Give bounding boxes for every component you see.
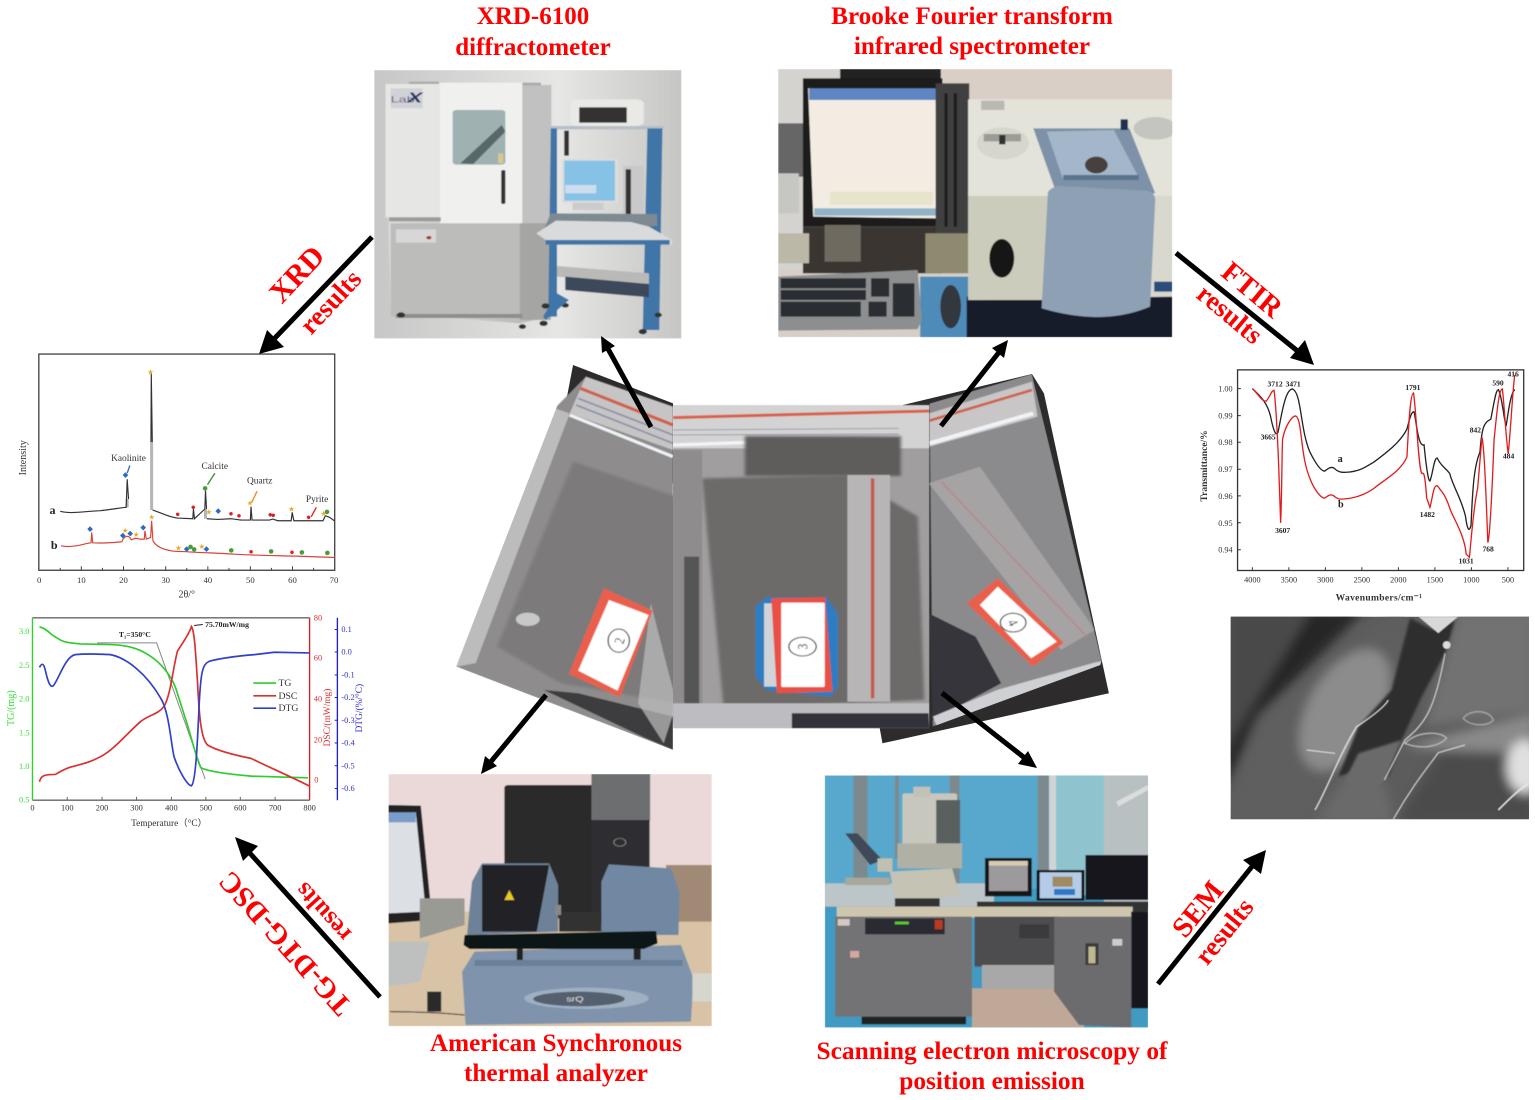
mineral pointers: [127, 466, 316, 517]
arrow: spectrometer to FTIR results: [1176, 253, 1314, 365]
label: XRD results: [263, 239, 367, 340]
arrow: diffractometer to XRD results: [259, 237, 372, 354]
mineral markers: ●: [203, 485, 208, 492]
axes frame: 10: [77, 575, 86, 585]
curve b: [61, 521, 335, 558]
label: SEM results: [1166, 875, 1260, 970]
legend: DSC: [278, 691, 297, 702]
bag 3: 3: [794, 644, 811, 649]
arrow: bags to SEM instrument: [942, 693, 1037, 768]
axes: -0.4: [341, 739, 355, 748]
arrow: SEM instrument to SEM results: [1158, 850, 1266, 984]
mineral markers: ●: [290, 551, 294, 556]
axes frame: 60: [288, 575, 298, 585]
axes: 300: [130, 803, 143, 812]
black background card right: [879, 374, 1109, 743]
photo: XRD-6100 diffractometer: [374, 70, 682, 339]
mineral markers: ●: [307, 516, 311, 521]
axes frame: Intensity: [18, 440, 29, 475]
axes: 1.5: [19, 729, 29, 738]
label: FTIR results: results: [1191, 278, 1269, 350]
mineral labels: Pyrite: [306, 495, 328, 505]
axes: 1000: [1463, 576, 1480, 585]
mineral markers: ★: [148, 513, 155, 522]
axes frame: 20: [119, 575, 129, 585]
axes: 600: [234, 803, 247, 812]
axes: 60: [314, 654, 322, 663]
axes: 0.98: [1218, 438, 1233, 447]
mineral labels: Calcite: [201, 462, 228, 472]
label: XRD results: results: [294, 264, 367, 340]
mineral markers: ●: [268, 548, 274, 555]
mineral markers: ★: [199, 542, 206, 551]
axes: Wavenumbers/cm⁻¹: [1336, 593, 1422, 603]
axes: 1.0: [19, 762, 29, 771]
axes: 0.94: [1218, 546, 1233, 555]
DTG curve: [39, 652, 310, 786]
axes frame: 0: [37, 575, 42, 585]
peak labels: 3665: [1261, 432, 1276, 441]
mineral markers: ◆: [140, 522, 146, 531]
axes frame: [18, 354, 339, 601]
mineral markers: ●: [188, 544, 193, 551]
axes: -0.5: [341, 761, 355, 770]
label: SEM results: results: [1188, 892, 1260, 970]
mineral labels: b: [51, 538, 58, 552]
peak labels: 3607: [1275, 526, 1290, 535]
axes: -0.3: [341, 716, 355, 725]
bag 2: [456, 377, 676, 750]
photo: XRD-6100 diffractometer: X: [406, 90, 424, 106]
mineral markers: [87, 367, 330, 557]
axes: 0: [314, 775, 318, 784]
title: Brooke Fourier transform infrared spectrometer: [831, 3, 1113, 60]
mineral labels: a: [50, 503, 56, 517]
axes: 3.0: [19, 627, 29, 636]
mineral markers: ◆: [87, 524, 93, 533]
axes: [6, 613, 365, 829]
peak labels: a: [1338, 454, 1343, 465]
photo: scanning electron microscope: [825, 775, 1149, 1028]
peak labels: 590: [1492, 378, 1504, 387]
bag 2: 2: [610, 636, 628, 645]
mineral labels: Quartz: [247, 476, 272, 486]
photo: Fourier transform infrared spectrometer: [778, 69, 1177, 337]
legend: TG: [278, 678, 291, 689]
axes: 400: [165, 803, 178, 812]
peak labels: 3471: [1286, 379, 1301, 388]
peak labels: b: [1338, 500, 1344, 511]
axes: 0.5: [19, 796, 29, 805]
axes: 0.95: [1218, 519, 1233, 528]
DSC curve: [39, 627, 310, 786]
chart: TG-DTG-DSC thermal curves: [6, 613, 365, 829]
title: American Synchronous thermal analyzer: thermal analyzer: [464, 1060, 648, 1087]
axes: Transmittance/%: [1200, 430, 1210, 501]
peak labels: [1261, 369, 1519, 566]
axes: 1500: [1427, 576, 1443, 585]
title: American Synchronous thermal analyzer: American Synchronous: [430, 1030, 682, 1057]
mineral markers: ●: [325, 550, 330, 557]
title: Brooke Fourier transform infrared spectrometer: infrared spectrometer: [854, 33, 1090, 60]
axes: TG/(mg): [6, 690, 17, 726]
axes: 500: [1502, 576, 1514, 585]
axes: 500: [200, 803, 212, 812]
peak labels: 416: [1508, 369, 1519, 378]
peak labels: 1791: [1405, 383, 1421, 392]
arrow: bags to thermal analyzer: [481, 695, 546, 774]
mineral markers: ●: [192, 546, 197, 553]
axes frame: 2θ/°: [178, 590, 195, 601]
axes: -0.6: [341, 784, 355, 793]
label: SEM results: SEM: [1166, 875, 1230, 944]
photo: American synchronous thermal analyzer: [388, 774, 712, 1026]
mineral markers: ●: [268, 513, 272, 518]
axes: DTG/(%/°C): [354, 684, 365, 732]
mineral markers: ●: [249, 550, 253, 555]
chart: XRD pattern: [18, 354, 339, 601]
axes frame: 30: [161, 575, 171, 585]
title: XRD-6100 diffractometer: [455, 3, 611, 61]
legend: DTG: [278, 703, 298, 714]
label: FTIR results: FTIR: [1215, 256, 1289, 325]
mineral markers: ★: [320, 509, 327, 518]
axes: 2.0: [19, 694, 29, 703]
mineral markers: ★: [206, 508, 213, 517]
mineral markers: ★: [288, 505, 295, 514]
tangent lines and annotations: 75.70mW/mg: [205, 620, 249, 629]
peak labels: 1031: [1459, 557, 1474, 566]
arrow: bags to spectrometer: [941, 340, 1008, 426]
label: TG-DTG-DSC results: TG-DTG-DSC: [213, 865, 358, 1021]
TG curve: [39, 627, 308, 778]
mineral markers: ★: [122, 526, 129, 535]
axes: 700: [269, 803, 281, 812]
photo: XRD-6100 diffractometer: Lab: [391, 94, 415, 105]
axes: 0: [30, 803, 35, 812]
bag 4: 4: [1004, 617, 1022, 629]
curve b: [1252, 375, 1515, 557]
title: XRD-6100 diffractometer: diffractometer: [455, 34, 611, 61]
mineral markers: ◆: [184, 544, 190, 553]
axes: 3500: [1281, 576, 1297, 585]
mineral markers: ★: [175, 544, 182, 553]
arrow: thermal analyzer to TG-DTG-DSC results: [235, 837, 380, 997]
tangent lines and annotations: [97, 620, 249, 779]
axes: 2000: [1390, 576, 1407, 585]
axes frame: 40: [204, 575, 213, 585]
axes: 2500: [1354, 576, 1370, 585]
axes: [1200, 370, 1524, 603]
axes: 3000: [1317, 576, 1334, 585]
axes: 20: [314, 735, 322, 744]
mineral markers: ●: [299, 549, 305, 556]
axes: DSC/(mW/mg): [322, 689, 333, 746]
arrow: bags to diffractometer: [601, 336, 651, 427]
bag 4: [929, 374, 1104, 727]
bag 3: [672, 405, 929, 728]
mineral markers: ◆: [204, 544, 210, 553]
peak labels: 842: [1470, 425, 1481, 434]
axes frame: 50: [246, 575, 255, 585]
axes: 2.5: [19, 661, 29, 670]
curve a: [1252, 389, 1515, 529]
axes frame: 70: [330, 575, 339, 585]
axes: 200: [96, 803, 108, 812]
photo: American synchronous thermal analyzer: srQ: [566, 995, 584, 1003]
peak labels: 768: [1483, 545, 1494, 554]
SEM micrograph: [1225, 610, 1535, 823]
mineral markers: ●: [237, 514, 241, 519]
tangent lines and annotations: T₁=350°C: [119, 630, 151, 639]
peak labels: 3712: [1268, 380, 1283, 389]
axes: 0.97: [1218, 465, 1233, 474]
mineral markers: ◆: [120, 530, 126, 539]
mineral markers: ●: [324, 508, 330, 515]
title: Scanning electron microscopy of position emission: position emission: [899, 1067, 1085, 1095]
title: XRD-6100 diffractometer: XRD-6100: [477, 3, 589, 30]
mineral markers: ●: [229, 512, 233, 517]
peak labels: 1482: [1420, 510, 1435, 519]
grey peak lower segments: [127, 442, 206, 519]
mineral markers: ◆: [123, 470, 129, 479]
central photo: sample bags: [456, 365, 1109, 750]
title: Scanning electron microscopy of position emission: [817, 1037, 1168, 1095]
axes: 0.99: [1218, 412, 1233, 421]
mineral markers: ●: [176, 513, 180, 518]
axes: 0.1: [341, 625, 352, 634]
axes: 0.96: [1218, 492, 1233, 501]
axes: Temperature（°C）: [131, 818, 207, 829]
axes: 800: [303, 803, 316, 812]
mineral markers: ★: [247, 499, 254, 508]
axes: 0.0: [341, 648, 352, 657]
chart: FTIR spectra: [1200, 369, 1524, 603]
mineral markers: ●: [271, 513, 275, 518]
mineral markers: ●: [191, 505, 195, 510]
axes: 1.00: [1218, 385, 1233, 394]
mineral markers: ◆: [215, 506, 221, 515]
mineral labels: Kaolinite: [111, 454, 146, 464]
label: TG-DTG-DSC results: results: [290, 877, 357, 947]
peak labels: 484: [1503, 452, 1514, 461]
mineral markers: ★: [147, 367, 154, 376]
curve a: [60, 373, 335, 521]
black background card left: [557, 365, 673, 483]
title: Scanning electron microscopy of position emission: Scanning electron microscopy of: [817, 1037, 1168, 1065]
legend: [253, 678, 298, 714]
label: FTIR results: [1191, 256, 1289, 350]
axes: 40: [314, 694, 322, 703]
label: XRD results: XRD: [263, 239, 331, 310]
mineral markers: ★: [133, 530, 140, 539]
axes: 100: [61, 803, 74, 812]
axes: 80: [314, 613, 322, 622]
title: American Synchronous thermal analyzer: [430, 1030, 682, 1087]
title: Brooke Fourier transform infrared spectrometer: Brooke Fourier transform: [831, 3, 1113, 30]
axes: 4000: [1244, 576, 1261, 585]
mineral labels: [50, 454, 328, 552]
mineral markers: ◆: [127, 528, 133, 537]
mineral markers: ●: [229, 547, 234, 554]
axes: -0.2: [341, 693, 355, 702]
axes: -0.1: [341, 671, 355, 680]
